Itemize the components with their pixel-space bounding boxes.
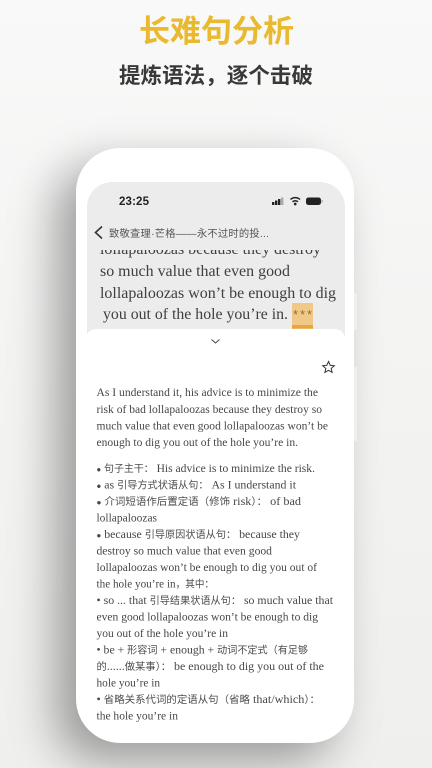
- sheet text: the hole you’re in，其中：: [96, 576, 214, 590]
- title: 长难句分析: [139, 6, 294, 51]
- sheet text: ● because 引导原因状语从句： because they: [96, 526, 300, 541]
- sheet text: ● as 引导方式状语从句： As I understand it: [96, 476, 297, 492]
- sheet text: enough to dig you out of the hole you’re in.: [96, 435, 298, 449]
- sheet text: lollapaloozas won’t be enough to dig you out of: [96, 560, 317, 574]
- highlight marker: [292, 303, 313, 329]
- phone screen: [87, 182, 345, 382]
- reading text: so much value that even good: [100, 262, 290, 280]
- phone side button bottom: [350, 367, 357, 441]
- sheet text: much value that even good lollapaloozas won’t be: [96, 418, 328, 432]
- reading text: [100, 250, 336, 322]
- sheet text: destroy so much value that even good: [96, 544, 272, 558]
- sheet text: • so ... that 引导结果状语从句： so much value that: [96, 592, 334, 607]
- phone side button top: [350, 293, 357, 330]
- sheet text: lollapaloozas: [96, 510, 157, 524]
- sheet text: ● 介词短语作后置定语（修饰 risk）： of bad: [96, 493, 301, 508]
- sheet text: 的......做某事）： be enough to dig you out of the: [96, 658, 324, 673]
- sheet text: the hole you’re in: [96, 708, 178, 722]
- sheet text: As I understand it, his advice is to minimize the: [96, 385, 318, 399]
- article title: 致敬查理·芒格——永不过时的投...: [109, 227, 269, 240]
- status bar time: 23:25: [119, 196, 150, 208]
- reading text: lollapaloozas won’t be enough to dig: [100, 284, 336, 302]
- icon: star: [323, 362, 334, 372]
- icon: signal: [272, 198, 283, 205]
- bottom sheet: [86, 329, 345, 719]
- highlight marker: ***: [293, 307, 312, 322]
- sheet text: you out of the hole you’re in: [96, 626, 228, 640]
- subtitle: 提炼语法，逐个击破: [119, 59, 313, 90]
- sheet text: even good lollapaloozas won’t be enough to dig: [96, 610, 318, 624]
- phone body: [76, 148, 354, 743]
- sheet text: ● 句子主干： His advice is to minimize the risk.: [96, 460, 315, 475]
- icon: back chevron: [96, 226, 102, 238]
- icon: wifi: [290, 198, 300, 205]
- icon: battery: [306, 198, 323, 205]
- sheet text: risk of bad lollapaloozas because they destroy so: [96, 402, 322, 416]
- sheet text: [96, 385, 334, 722]
- sheet text: hole you’re in: [96, 676, 160, 690]
- page content overlay: [94, 15, 336, 722]
- sheet text: • 省略关系代词的定语从句（省略 that/which）：: [96, 691, 320, 706]
- sheet text: • be + 形容词 + enough + 动词不定式（有足够: [96, 642, 308, 656]
- reading text: you out of the hole you’re in.: [103, 305, 288, 323]
- reading text: lollapaloozas because they destroy: [100, 240, 322, 258]
- icon: chevron down: [212, 340, 220, 343]
